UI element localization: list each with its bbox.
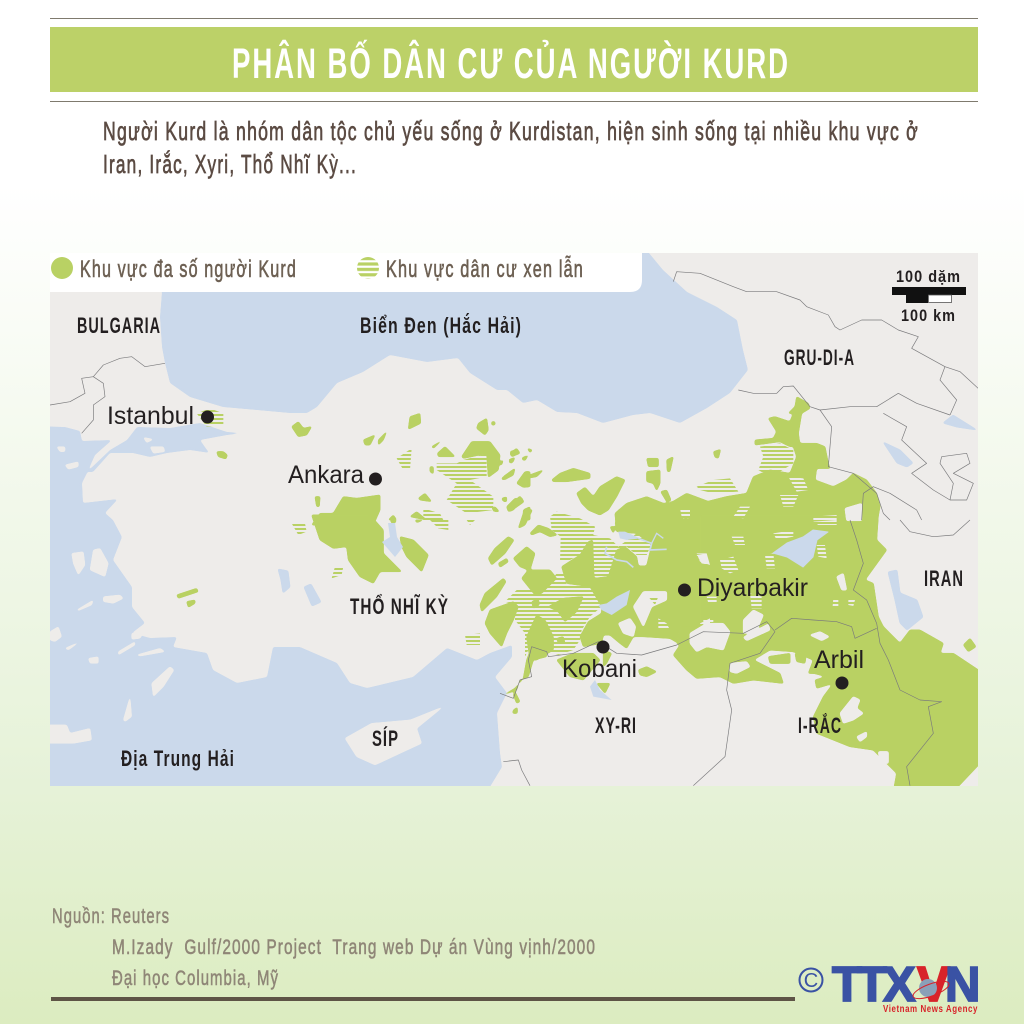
reservoirs and rivers	[598, 532, 667, 615]
copyright mark	[800, 968, 822, 992]
legend: majority	[51, 256, 297, 283]
intro text	[103, 116, 919, 179]
kurdish majority areas, north east	[502, 397, 880, 525]
legend: mixed: Khu vực dân cư xen lẫn	[386, 256, 584, 283]
city: Ankara: Ankara	[288, 461, 364, 489]
label: Turkey: THỔ NHĨ KỲ	[350, 594, 449, 619]
cutout near lake van north	[845, 503, 862, 521]
scale bar: 100 km	[901, 306, 956, 325]
keban lake	[382, 523, 403, 557]
city: Diyarbakir: Diyarbakir	[697, 574, 808, 602]
map	[30, 230, 983, 800]
black sea	[130, 230, 748, 423]
seas	[30, 230, 748, 800]
label: Iraq: I-RẮC	[798, 713, 842, 738]
sea of marmara	[87, 423, 245, 472]
stripes inside southern majority area	[697, 520, 855, 627]
source text: M.Izady Gulf/2000 Project Trang web Dự án Vùng vịnh/2000	[112, 935, 596, 959]
label: Bulgaria: BULGARIA	[77, 313, 161, 338]
islands	[40, 548, 443, 765]
title banner	[50, 27, 978, 92]
city: Arbil	[814, 646, 864, 690]
cutouts around upper euphrates	[618, 592, 667, 637]
country borders	[50, 357, 165, 433]
intro text: Iran, Irắc, Xyri, Thổ Nhĩ Kỳ...	[103, 149, 357, 179]
mixed and majority areas, central	[292, 520, 480, 645]
label: Mediterranean: Địa Trung Hải	[121, 746, 235, 771]
mixed population areas, north east	[697, 443, 793, 493]
city: Istanbul	[109, 406, 214, 424]
legend panel	[50, 253, 642, 292]
legend: mixed	[357, 256, 584, 283]
copyright mark: C	[804, 970, 818, 992]
syrian lake	[590, 680, 612, 700]
source text	[52, 904, 596, 990]
mixed population areas, west	[197, 408, 493, 520]
lake van	[773, 530, 828, 567]
scale bar	[892, 267, 966, 325]
logo: TTXVN: Vietnam News Agency	[883, 1003, 978, 1015]
stripes near upper euphrates	[648, 508, 710, 630]
land base	[50, 253, 978, 786]
kurdish majority areas, south east	[503, 515, 983, 792]
source text: Đại học Columbia, Mỹ	[112, 966, 279, 990]
scale bar: 100 dặm	[896, 267, 961, 286]
city: Arbil: Arbil	[814, 646, 864, 674]
stripes inside northern majority area	[680, 477, 837, 521]
legend: majority: Khu vực đa số người Kurd	[80, 256, 297, 283]
label: Iran: IRAN	[924, 566, 964, 591]
city: Istanbul: Istanbul	[107, 402, 194, 430]
source text: Nguồn: Reuters	[52, 904, 170, 928]
mixed population areas, upper and lower euphrates	[505, 512, 652, 657]
label: Syria: XY-RI	[595, 713, 637, 738]
lakes	[278, 415, 977, 630]
label: Cyprus: SÍP	[372, 726, 399, 751]
city: Kobani: Kobani	[562, 655, 637, 683]
label: Georgia: GRU-DI-A	[784, 345, 855, 370]
unpopulated cutouts	[690, 573, 888, 763]
label: Black Sea: Biển Đen (Hắc Hải)	[360, 313, 522, 338]
city: Kobani	[562, 640, 637, 683]
kurdish majority areas, upper and lower euphrates	[480, 493, 713, 660]
green islands inside the cutouts	[768, 652, 807, 663]
kurdish majority areas, west	[217, 413, 530, 525]
mediterranean and aegean sea	[30, 426, 512, 800]
city: Ankara	[288, 465, 382, 486]
logo: TTXVN: TTXVN	[832, 958, 980, 1012]
